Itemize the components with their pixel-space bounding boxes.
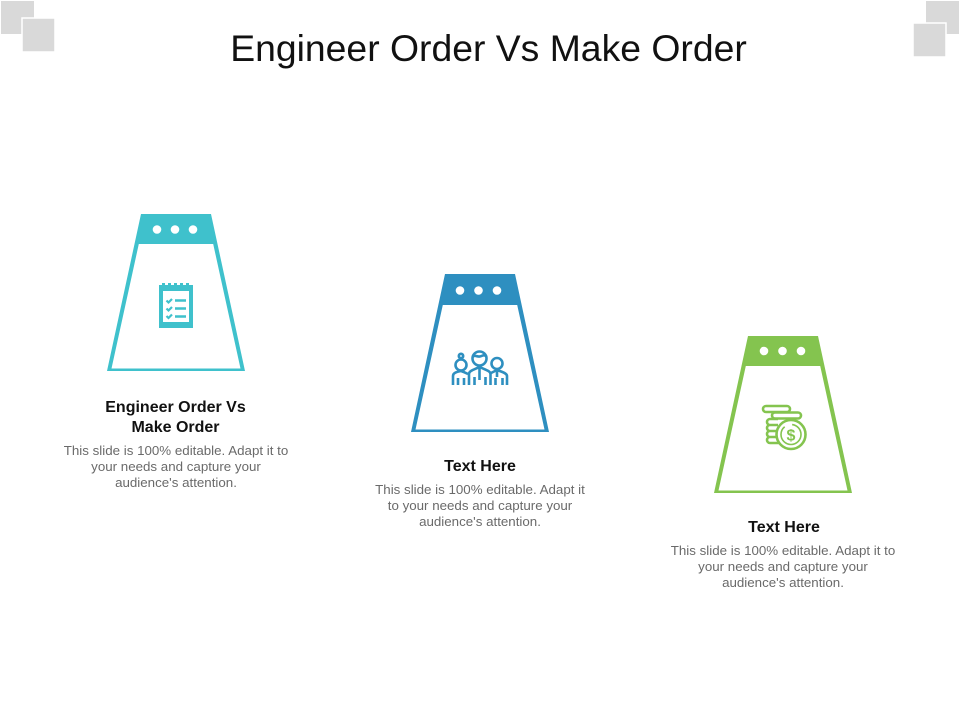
text: engineer order description: audience's attention.: [115, 475, 237, 490]
text: right description: [671, 543, 895, 590]
text: middle description: This slide is 100% editable. Adapt it: [375, 482, 585, 497]
icon: coin stack with dollar: [763, 406, 806, 449]
text: middle description: [375, 482, 585, 529]
text: engineer order description: [64, 443, 288, 490]
text: engineer order description: your needs and capture your: [91, 459, 261, 474]
decoration: top-right squares: [914, 1, 959, 56]
text: right description: audience's attention.: [722, 575, 844, 590]
text: right description: your needs and capture your: [698, 559, 868, 574]
heading: engineer order: [105, 399, 246, 436]
text: middle description: audience's attention.: [419, 514, 541, 529]
icon: checklist notepad: [159, 283, 193, 328]
icon: dollar sign: $: [787, 428, 796, 444]
text: middle description: to your needs and capture your: [388, 498, 572, 513]
icon: three people: [453, 352, 507, 385]
heading: text here middle: Text Here: [444, 458, 516, 475]
decoration: top-left squares: [1, 1, 54, 52]
title: Engineer Order Vs Make Order: [230, 27, 747, 69]
text: right description: This slide is 100% editable. Adapt it to: [671, 543, 895, 558]
heading: engineer order: Make Order: [131, 419, 220, 436]
text: engineer order description: This slide is 100% editable. Adapt it to: [64, 443, 288, 458]
heading: text here right: Text Here: [748, 519, 820, 536]
heading: engineer order: Engineer Order Vs: [105, 399, 246, 416]
